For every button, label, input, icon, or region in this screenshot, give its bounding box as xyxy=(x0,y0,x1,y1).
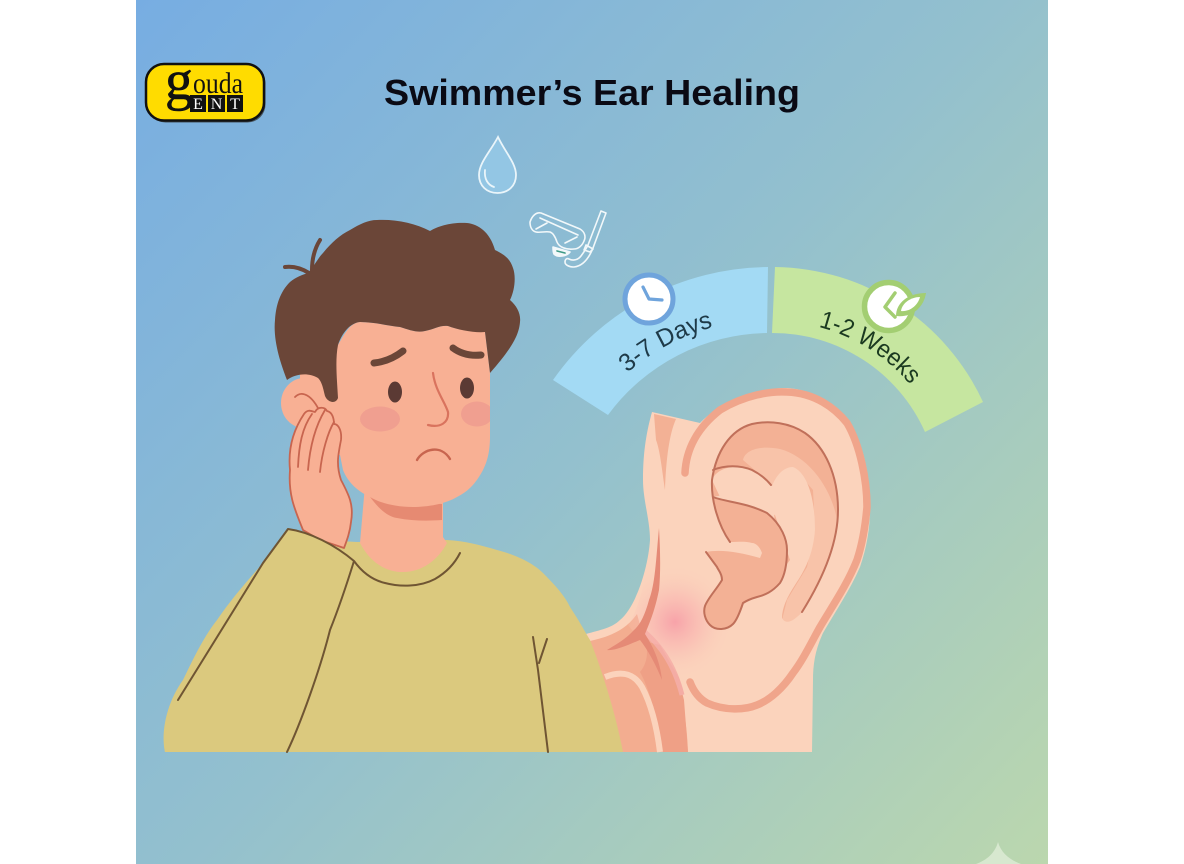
ear contour lines xyxy=(704,422,838,629)
sweater xyxy=(164,529,623,752)
inner helix shade xyxy=(743,448,837,622)
antihelix xyxy=(712,467,815,640)
timeline arc: 1-2 weeks xyxy=(772,267,983,432)
icon: clock xyxy=(625,275,673,323)
stray hair tufts xyxy=(285,240,320,273)
title: Swimmer’s Ear Healing xyxy=(384,72,800,113)
logo: Gouda ENT: N xyxy=(211,96,223,113)
nose xyxy=(428,373,448,426)
logo: Gouda ENT: ouda xyxy=(193,67,243,100)
sweater seam lines xyxy=(178,529,548,752)
sleeve covering wrist xyxy=(164,529,354,752)
neck and ear skin xyxy=(586,388,870,752)
icon: clock with leaf xyxy=(864,282,926,330)
redness at ear canal xyxy=(630,586,710,658)
icon: water drop xyxy=(479,137,516,193)
concha xyxy=(704,497,787,629)
background panel xyxy=(136,0,1048,864)
finger lines xyxy=(298,410,334,472)
head and face xyxy=(300,322,490,507)
sparkle decoration xyxy=(976,842,1021,864)
ear fold line xyxy=(295,394,320,412)
illustration: ear close-up xyxy=(586,388,870,752)
timeline arc: 1-2 weeks: 1-2 Weeks xyxy=(820,312,918,383)
left ear of character xyxy=(281,378,327,428)
logo: Gouda ENT xyxy=(146,50,266,122)
neck xyxy=(360,485,447,572)
cheeks xyxy=(360,402,493,432)
logo: Gouda ENT: g xyxy=(165,50,193,112)
eyes xyxy=(388,378,474,402)
hair xyxy=(275,220,520,402)
neck shadow xyxy=(364,488,442,521)
timeline arc: 3-7 days xyxy=(553,267,768,415)
outer ear rim xyxy=(685,392,867,709)
neck fold creases xyxy=(607,528,662,680)
timeline arc: 3-7 days: 3-7 Days xyxy=(619,316,712,370)
helix band xyxy=(712,422,838,622)
pink band along canal xyxy=(640,632,688,752)
mouth xyxy=(417,450,450,460)
lower neck pad xyxy=(590,614,688,752)
icon: swim mask and snorkel xyxy=(530,211,606,267)
hand xyxy=(290,408,352,548)
character: boy holding ear xyxy=(164,220,623,752)
light inner strip xyxy=(605,674,660,752)
eyebrows xyxy=(374,348,481,363)
logo: Gouda ENT: T xyxy=(230,96,240,113)
logo: Gouda ENT: E xyxy=(193,96,203,113)
neck top strip xyxy=(654,414,676,490)
